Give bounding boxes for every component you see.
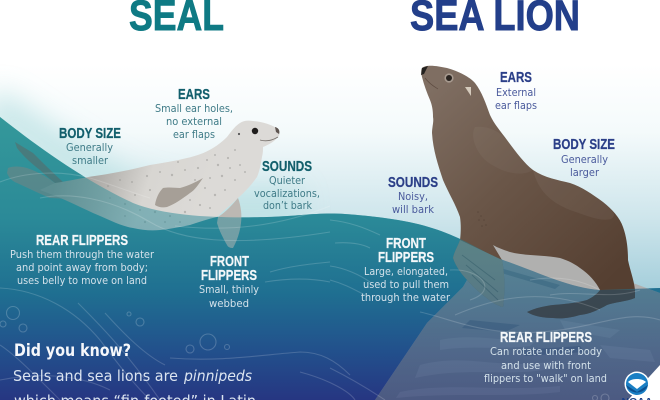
did you know callout: Did you know? (14, 341, 131, 361)
sea lion front flippers text: through the water (361, 291, 450, 304)
sea lion body size text: BODY SIZE (553, 137, 615, 153)
seal ears text: ear flaps (173, 128, 215, 141)
NOAA logo (622, 372, 653, 400)
soft glow along the water edge (0, 105, 300, 207)
sea lion front flippers text: used to pull them (363, 278, 449, 291)
did you know callout: pinnipeds (183, 367, 252, 385)
sea lion rear flippers text: and use with front (501, 359, 592, 372)
seal body size text: BODY SIZE (59, 126, 121, 142)
sea lion front flippers text: FRONT (386, 236, 426, 252)
sea lion eye (444, 73, 454, 83)
seal sounds text: vocalizations, (254, 187, 320, 200)
seal ears text: EARS (178, 87, 210, 103)
sea lion flipper streaks (462, 255, 498, 300)
sea lion rear flippers text: flippers to "walk" on land (484, 372, 607, 385)
seal sounds text: don’t bark (263, 199, 313, 212)
seal spots (107, 149, 246, 223)
sea lion front flippers text (361, 236, 450, 304)
sea lion front flippers text: FLIPPERS (378, 250, 434, 266)
seal front flippers text: Small, thinly (199, 283, 259, 296)
sea lion front flipper lighter underwater part (453, 240, 504, 307)
seal (7, 121, 280, 248)
sea lion ears text: EARS (500, 70, 532, 86)
sea lion sounds text: Noisy, (398, 190, 428, 203)
seal rear flippers (15, 142, 90, 190)
did you know callout (13, 341, 256, 400)
sea lion ear flap (465, 87, 471, 96)
water body (0, 117, 660, 400)
sea lion front flippers text: Large, elongated, (364, 265, 448, 278)
sea lion (421, 66, 635, 318)
sea lion body size text: Generally (561, 153, 608, 166)
bottom right white corner (628, 365, 660, 400)
seal rear flippers text: Push them through the water (10, 248, 154, 261)
sea lion back highlight (533, 170, 614, 220)
seal body size text: smaller (72, 154, 108, 167)
seal sounds text (254, 159, 320, 212)
translucent water overlay (0, 117, 660, 400)
seal body (40, 121, 280, 230)
sea lion rear flippers text: REAR FLIPPERS (500, 330, 592, 346)
seal eye (252, 128, 258, 134)
sea lion muzzle (421, 66, 428, 75)
seal rear flippers text (10, 233, 154, 287)
sea lion sounds text: will bark (392, 203, 435, 216)
seal sounds text: SOUNDS (262, 159, 312, 175)
sea lion rear flippers text (484, 330, 607, 385)
seal rear flippers text: uses belly to move on land (17, 274, 147, 287)
sea lion rear flippers text: Can rotate under body (490, 345, 602, 358)
sea lion whisker line (425, 78, 438, 89)
seal rear flippers text: and point away from body; (16, 261, 148, 274)
sea lion ears text: External (496, 86, 536, 99)
sea lion rear flipper shade (527, 290, 635, 318)
sea lion body size text (553, 137, 615, 179)
wave lines (0, 173, 660, 400)
seal ears text: Small ear holes, (155, 102, 233, 115)
seal front flippers text: webbed (209, 297, 249, 310)
sea lion body size text: larger (570, 166, 599, 179)
seal front flippers text (199, 254, 259, 310)
rock under the sea lion (375, 240, 660, 400)
seal front flippers text: FRONT (210, 254, 249, 270)
sea lion ears text: ear flaps (495, 99, 537, 112)
seal front flippers text: FLIPPERS (201, 268, 257, 284)
did you know callout: Seals and sea lions are (13, 367, 178, 385)
sea lion ears text (495, 70, 537, 112)
seal sounds text: Quieter (269, 174, 305, 187)
seal ear hole (238, 133, 240, 135)
sea lion sounds text (388, 175, 438, 216)
sea lion sounds text: SOUNDS (388, 175, 438, 191)
bubbles (0, 306, 609, 400)
seal ears text (155, 87, 233, 141)
sea lion speckle (477, 211, 487, 227)
seal body size text (59, 126, 121, 167)
seal mouth (260, 137, 278, 141)
seal small side flipper (155, 178, 203, 207)
seal nose (275, 127, 279, 134)
seal body size text: Generally (66, 141, 113, 154)
seal rear flippers text: REAR FLIPPERS (36, 233, 128, 249)
seal ears text: no external (166, 115, 222, 128)
sea lion shoulder highlight (473, 127, 533, 174)
seal front flipper (217, 198, 241, 248)
